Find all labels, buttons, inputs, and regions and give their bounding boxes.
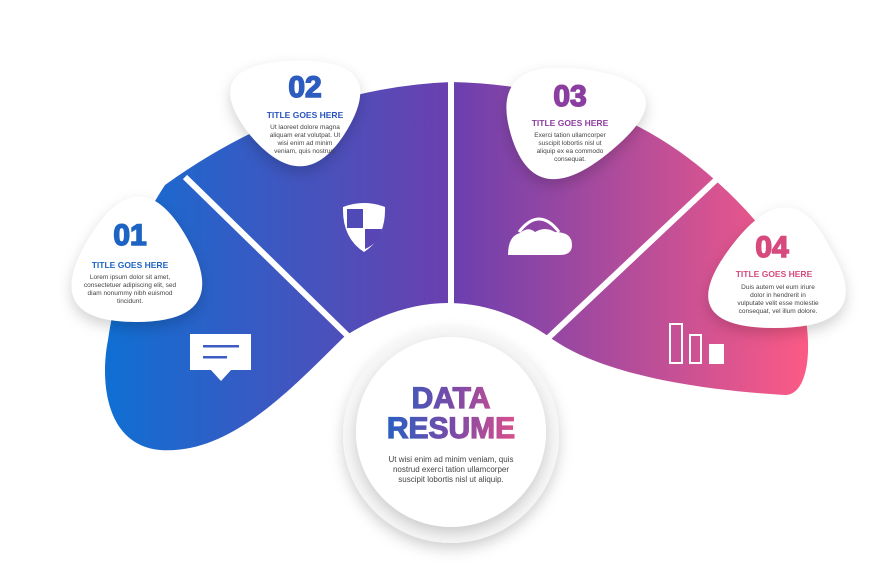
bubble 04: 04 [755, 231, 789, 264]
bubble 01: diam nonummy nibh euismod [88, 290, 173, 297]
bubble 02: veniam, quis nostrud. [274, 148, 336, 155]
bubble 02: Ut laoreet dolore magna [270, 124, 340, 131]
center body: suscipit lobortis nisl ut aliquip. [398, 475, 504, 484]
bubble 02: 02 [288, 71, 322, 104]
bubble 01: tincidunt. [117, 298, 143, 305]
center body: nostrud exerci tation ullamcorper [393, 465, 509, 474]
bubble 03: suscipit lobortis nisl ut [538, 140, 602, 147]
bubble 03: TITLE GOES HERE [532, 118, 609, 128]
bubble 02 [230, 61, 360, 166]
bubble 03: Exerci tation ullamcorper [534, 132, 607, 139]
bubble 03: consequat. [554, 156, 586, 163]
bubble 04 [708, 208, 846, 328]
bubble 04: TITLE GOES HERE [736, 269, 813, 279]
bubble 04: Duis autem vel eum iriure [741, 284, 815, 291]
icon: bar chart [670, 324, 723, 363]
bubble 01: consectetuer adipiscing elit, sed [84, 282, 176, 289]
bubble 02: aliquam erat volutpat. Ut [270, 132, 340, 139]
bubble 01: 01 [113, 219, 147, 252]
fan shape [105, 78, 808, 450]
bubble 01: TITLE GOES HERE [92, 260, 169, 270]
center circle [343, 327, 559, 543]
center circle: RESUME [387, 412, 515, 445]
bubble 03: 03 [553, 80, 587, 113]
bubble 01 [72, 196, 202, 322]
bubble 04: dolor in hendrerit in [750, 292, 806, 299]
icon: shield [343, 203, 385, 252]
bubble 04: vulputate velit esse molestie [737, 300, 819, 307]
bubble 01: Lorem ipsum dolor sit amet, [90, 274, 170, 281]
icon: chat [190, 334, 251, 381]
bubble 02: TITLE GOES HERE [267, 110, 344, 120]
bubble 03 [506, 68, 646, 179]
bubble 04: consequat, vel illum dolore. [739, 308, 818, 315]
center title: DATA [412, 382, 490, 415]
center body: Ut wisi enim ad minim veniam, quis [389, 455, 513, 464]
bubble 02: wisi enim ad minim [277, 140, 332, 147]
icon: cloud [508, 219, 572, 255]
bubble 03: aliquip ex ea commodo [537, 148, 604, 155]
